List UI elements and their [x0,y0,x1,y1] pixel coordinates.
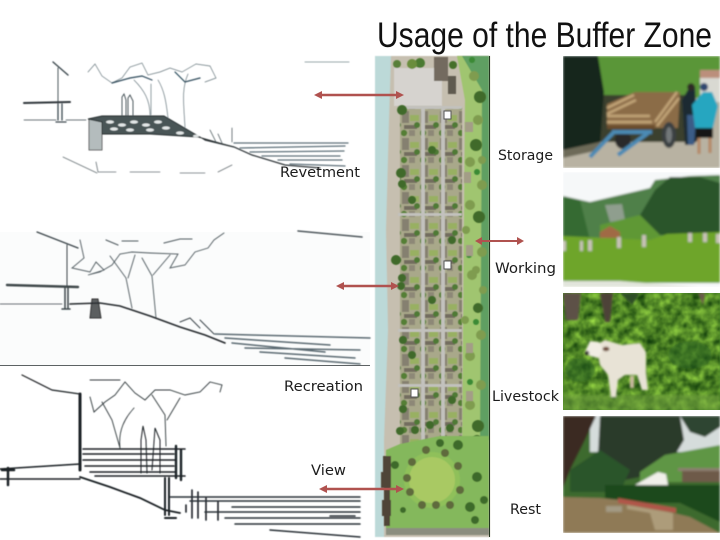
photo detail: hut [600,226,620,238]
divider between sketches [0,365,370,366]
photo detail: people on the field [563,233,720,251]
photo detail: sandy ground [563,497,720,533]
photo detail: wooden cart [607,92,680,128]
photo detail: two people [682,83,718,154]
map: water and sand [375,56,490,537]
site plan map [375,56,490,537]
sketch: pylon and deck [24,62,86,122]
sketch: water [215,334,370,364]
photo detail: foliage shade [565,341,712,382]
arrow: working [475,237,524,245]
panel: view deck section sketch [0,375,360,537]
sketch: figures [141,426,160,473]
sketch: bank and water [63,62,349,173]
label: Rest: Rest [510,502,542,518]
label: Livestock: Livestock [492,389,560,405]
label: Storage: Storage [498,148,553,164]
sketch: water [170,497,360,537]
sketch: wall post [90,299,101,318]
photo detail: white cow [585,340,648,397]
photo: field, working [563,172,720,287]
photo detail: white tent and building [635,468,720,485]
sketch: stone revetment [88,116,234,147]
map: village blocks and street grid [398,106,462,448]
label: View: View [311,463,346,479]
sketch: retaining wall [89,119,102,150]
photo detail: blue frame and wheels [590,122,676,157]
map: right green belt [457,56,489,440]
sketch: deck platform [0,446,185,485]
sketch: trees and canopy [90,380,222,448]
park: southern edge [386,528,489,535]
panel: revetment section sketch [24,62,349,173]
label: Recreation: Recreation [284,379,363,395]
label: Revetment: Revetment [280,165,361,181]
map: plaza and top buildings [393,57,457,106]
photo detail: concrete benches [606,498,676,530]
sketch: trees [88,63,216,128]
sketch: trees and canopy [72,233,224,318]
sketch: slope and pilings [80,477,218,520]
photo: cow, livestock [563,293,720,410]
label: Working: Working [495,261,556,277]
map: trees along village and belt [391,57,487,445]
sketch: pylon and deck [0,232,78,309]
photo detail: dark trunks [563,293,705,322]
arrow: view [319,485,404,493]
map: park with circular lawn [381,436,489,535]
sketch: figures [122,94,133,116]
photo: trees and benches, rest [563,416,720,533]
photo detail: hedge [605,485,720,522]
sketch background [0,232,370,365]
sketch: roof and column [22,375,80,470]
photo: cart, storage [563,56,720,168]
park: ring of huts and trees [403,446,464,509]
photo detail: large trunk [563,416,596,488]
panel: recreation section sketch [0,231,370,366]
arrow: storage plaza to revetment [314,91,404,99]
sketch: ground slope and plants [70,303,225,343]
map: right boundary line [489,56,490,537]
park: shoreline buildings [381,456,391,526]
arrow: recreation [336,282,399,290]
